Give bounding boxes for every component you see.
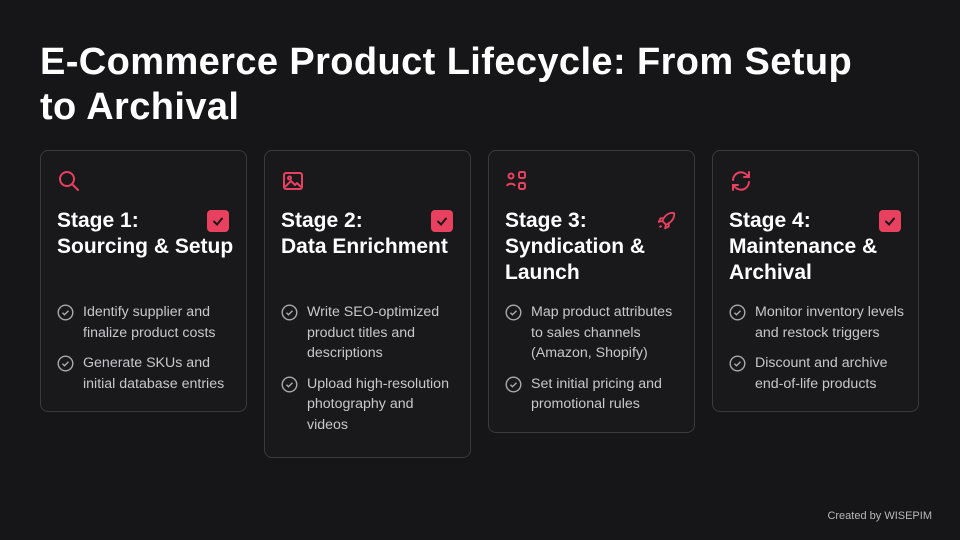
bullets bbox=[58, 304, 224, 392]
icon: refresh bbox=[732, 171, 750, 191]
bullets: Discount and archive bbox=[755, 355, 888, 371]
bullets: descriptions bbox=[307, 345, 383, 361]
heading: Maintenance & bbox=[729, 235, 877, 258]
title: E-Commerce Product Lifecycle: From Setup bbox=[40, 41, 852, 83]
heading: Stage 1: bbox=[57, 209, 139, 232]
panel: stage 2 bbox=[264, 150, 471, 458]
bullets: Identify supplier and bbox=[83, 304, 210, 320]
heading: Sourcing & Setup bbox=[57, 235, 233, 258]
bullets: photography and bbox=[307, 396, 414, 412]
bullets: end-of-life products bbox=[755, 376, 876, 392]
bullets: Generate SKUs and bbox=[83, 355, 210, 371]
icon: image bbox=[283, 172, 303, 190]
heading bbox=[57, 209, 233, 258]
title bbox=[40, 41, 852, 128]
heading: Stage 2: bbox=[281, 209, 363, 232]
bullets: initial database entries bbox=[83, 376, 224, 392]
heading: Archival bbox=[729, 261, 812, 284]
heading: Stage 4: bbox=[729, 209, 811, 232]
bullets: Write SEO-optimized bbox=[307, 304, 439, 320]
bullets: Map product attributes bbox=[531, 304, 672, 320]
panel: stage 3 bbox=[488, 150, 695, 433]
bullets: finalize product costs bbox=[83, 324, 215, 340]
bullets bbox=[282, 304, 449, 432]
heading: Syndication & bbox=[505, 235, 645, 258]
icon: search bbox=[59, 171, 79, 191]
panel: stage 1 bbox=[40, 150, 247, 412]
heading bbox=[505, 209, 645, 284]
bullets: Set initial pricing and bbox=[531, 376, 662, 392]
footer credit: Created by WISEPIM bbox=[827, 510, 932, 522]
bullets bbox=[506, 304, 672, 412]
heading bbox=[729, 209, 877, 284]
title: to Archival bbox=[40, 86, 239, 128]
bullets: Upload high-resolution bbox=[307, 376, 449, 392]
icon: check badge bbox=[207, 210, 229, 232]
bullets: (Amazon, Shopify) bbox=[531, 345, 648, 361]
icon: check badge bbox=[431, 210, 453, 232]
panel: stage 4 bbox=[712, 150, 919, 412]
icon: people/blocks bbox=[506, 171, 526, 190]
heading: Launch bbox=[505, 261, 580, 284]
bullets: Monitor inventory levels bbox=[755, 304, 904, 320]
bullets: product titles and bbox=[307, 324, 415, 340]
bullets: promotional rules bbox=[531, 396, 640, 412]
heading bbox=[281, 209, 448, 258]
bullets: videos bbox=[307, 416, 348, 432]
bullets bbox=[730, 304, 904, 392]
icon: check badge bbox=[879, 210, 901, 232]
bullets: and restock triggers bbox=[755, 324, 880, 340]
heading: Data Enrichment bbox=[281, 235, 448, 258]
bullets: to sales channels bbox=[531, 324, 641, 340]
heading: Stage 3: bbox=[505, 209, 587, 232]
icon: rocket bbox=[658, 212, 676, 230]
